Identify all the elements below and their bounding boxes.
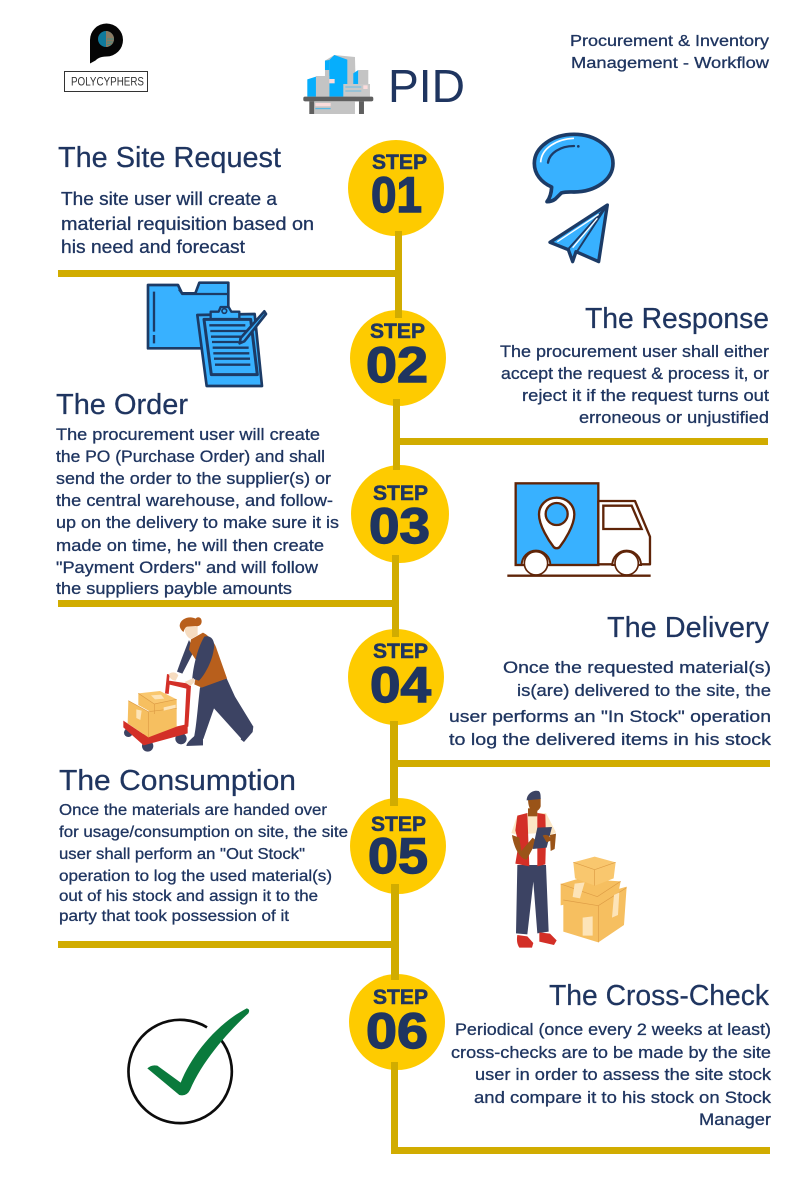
section 6: The Cross-Check: Manager (699, 1110, 771, 1129)
section 4: The Delivery: user performs an "In Stock" operation (449, 707, 771, 726)
step 01 badge (348, 140, 444, 236)
section 5: The Consumption: user shall perform an "Out Stock" (59, 846, 305, 863)
icon: check mark in circle (128, 1008, 249, 1123)
step 02 badge (350, 310, 446, 406)
section 3: The Order: the suppliers payble amounts (56, 579, 292, 598)
section 2: The Response: reject it if the request turns out (522, 386, 769, 405)
trolley handle (165, 674, 191, 728)
section 5: The Consumption: The Consumption (59, 765, 296, 797)
step 06 badge: STEP (373, 986, 428, 1009)
step 02 badge: STEP (370, 320, 425, 343)
section 3: The Order: send the order to the supplier(s) or (56, 469, 331, 488)
section 6: The Cross-Check: and compare it to his stock on Stock (474, 1088, 772, 1107)
icon: worker pushing trolley (123, 617, 253, 752)
section 3: The Order: up on the delivery to make sure it is (56, 513, 339, 532)
section 5: The Consumption (59, 765, 348, 925)
section 1: The Site Request: material requisition based on (61, 214, 314, 234)
subtitle: workflow name (570, 33, 770, 72)
section 3: The Order: the PO (Purchase Order) and shall (56, 447, 325, 466)
section 1: The Site Request: The Site Request (58, 142, 281, 174)
section 4: The Delivery: The Delivery (607, 612, 769, 644)
section 5: The Consumption: operation to log the used material(s) (59, 868, 332, 885)
step 04 badge (348, 629, 444, 725)
step 05 badge: STEP (371, 813, 426, 836)
section 4: The Delivery: is(are) delivered to the site, the (517, 681, 771, 700)
section 6: The Cross-Check: The Cross-Check (549, 980, 769, 1012)
icon: worker with clipboard and boxes (511, 791, 627, 948)
subtitle: workflow name: Management - Workflow (571, 55, 770, 72)
step 03 badge: STEP (373, 482, 428, 505)
step 05 badge (350, 798, 446, 894)
step 06 badge (349, 974, 445, 1070)
title: PID: PID (388, 60, 465, 112)
section 5: The Consumption: party that took possession of it (59, 908, 290, 925)
section 3: The Order: made on time, he will then create (56, 536, 324, 555)
section 2: The Response: accept the request & process it, or (501, 364, 769, 383)
step 05 badge: 05 (368, 828, 428, 884)
section 1: The Site Request: his need and forecast (61, 237, 245, 257)
step 01 badge: 01 (371, 167, 422, 223)
section 2: The Response: The Response (585, 303, 769, 335)
icon: folder and clipboard (148, 283, 266, 386)
section 1: The Site Request (58, 142, 314, 257)
section 2: The Response (500, 303, 769, 427)
section 4: The Delivery: to log the delivered items in his stock (449, 730, 772, 749)
step 04 badge: STEP (373, 640, 428, 663)
section 6: The Cross-Check: Periodical (once every 2 weeks at least) (455, 1020, 771, 1039)
connector lines (58, 231, 770, 1154)
section 6: The Cross-Check (451, 980, 772, 1129)
icon: delivery truck with location pin (507, 483, 651, 576)
section 1: The Site Request: The site user will create a (61, 189, 278, 209)
section 3: The Order: The Order (56, 389, 188, 421)
subtitle: workflow name: Procurement & Inventory (570, 33, 769, 50)
step 06 badge: 06 (366, 1003, 428, 1059)
section 2: The Response: The procurement user shall either (500, 342, 769, 361)
step 03 badge: 03 (369, 498, 430, 554)
logo: Polycyphers: POLYCYPHERS (71, 76, 144, 88)
section 5: The Consumption: for usage/consumption on site, the site (59, 824, 348, 841)
icon: warehouse shelf with boxes (303, 55, 373, 114)
section 5: The Consumption: out of his stock and assign it to the (59, 888, 318, 905)
icon: speech bubble and paper plane (534, 134, 613, 262)
section 6: The Cross-Check: cross-checks are to be made by the site (451, 1043, 771, 1062)
section 3: The Order: "Payment Orders" and will follow (56, 558, 319, 577)
section 6: The Cross-Check: user in order to assess the site stock (475, 1065, 772, 1084)
section 5: The Consumption: Once the materials are handed over (59, 802, 328, 819)
logo: Polycyphers (64, 24, 148, 92)
section 4: The Delivery (449, 612, 772, 749)
section 3: The Order: the central warehouse, and follow- (56, 491, 333, 510)
section 4: The Delivery: Once the requested material(s) (503, 658, 771, 677)
section 2: The Response: erroneous or unjustified (579, 408, 769, 427)
step 03 badge (351, 465, 449, 563)
step 01 badge: STEP (372, 151, 427, 174)
step 04 badge: 04 (370, 657, 431, 713)
section 3: The Order (56, 389, 339, 598)
step 02 badge: 02 (366, 337, 428, 393)
section 3: The Order: The procurement user will create (56, 425, 320, 444)
